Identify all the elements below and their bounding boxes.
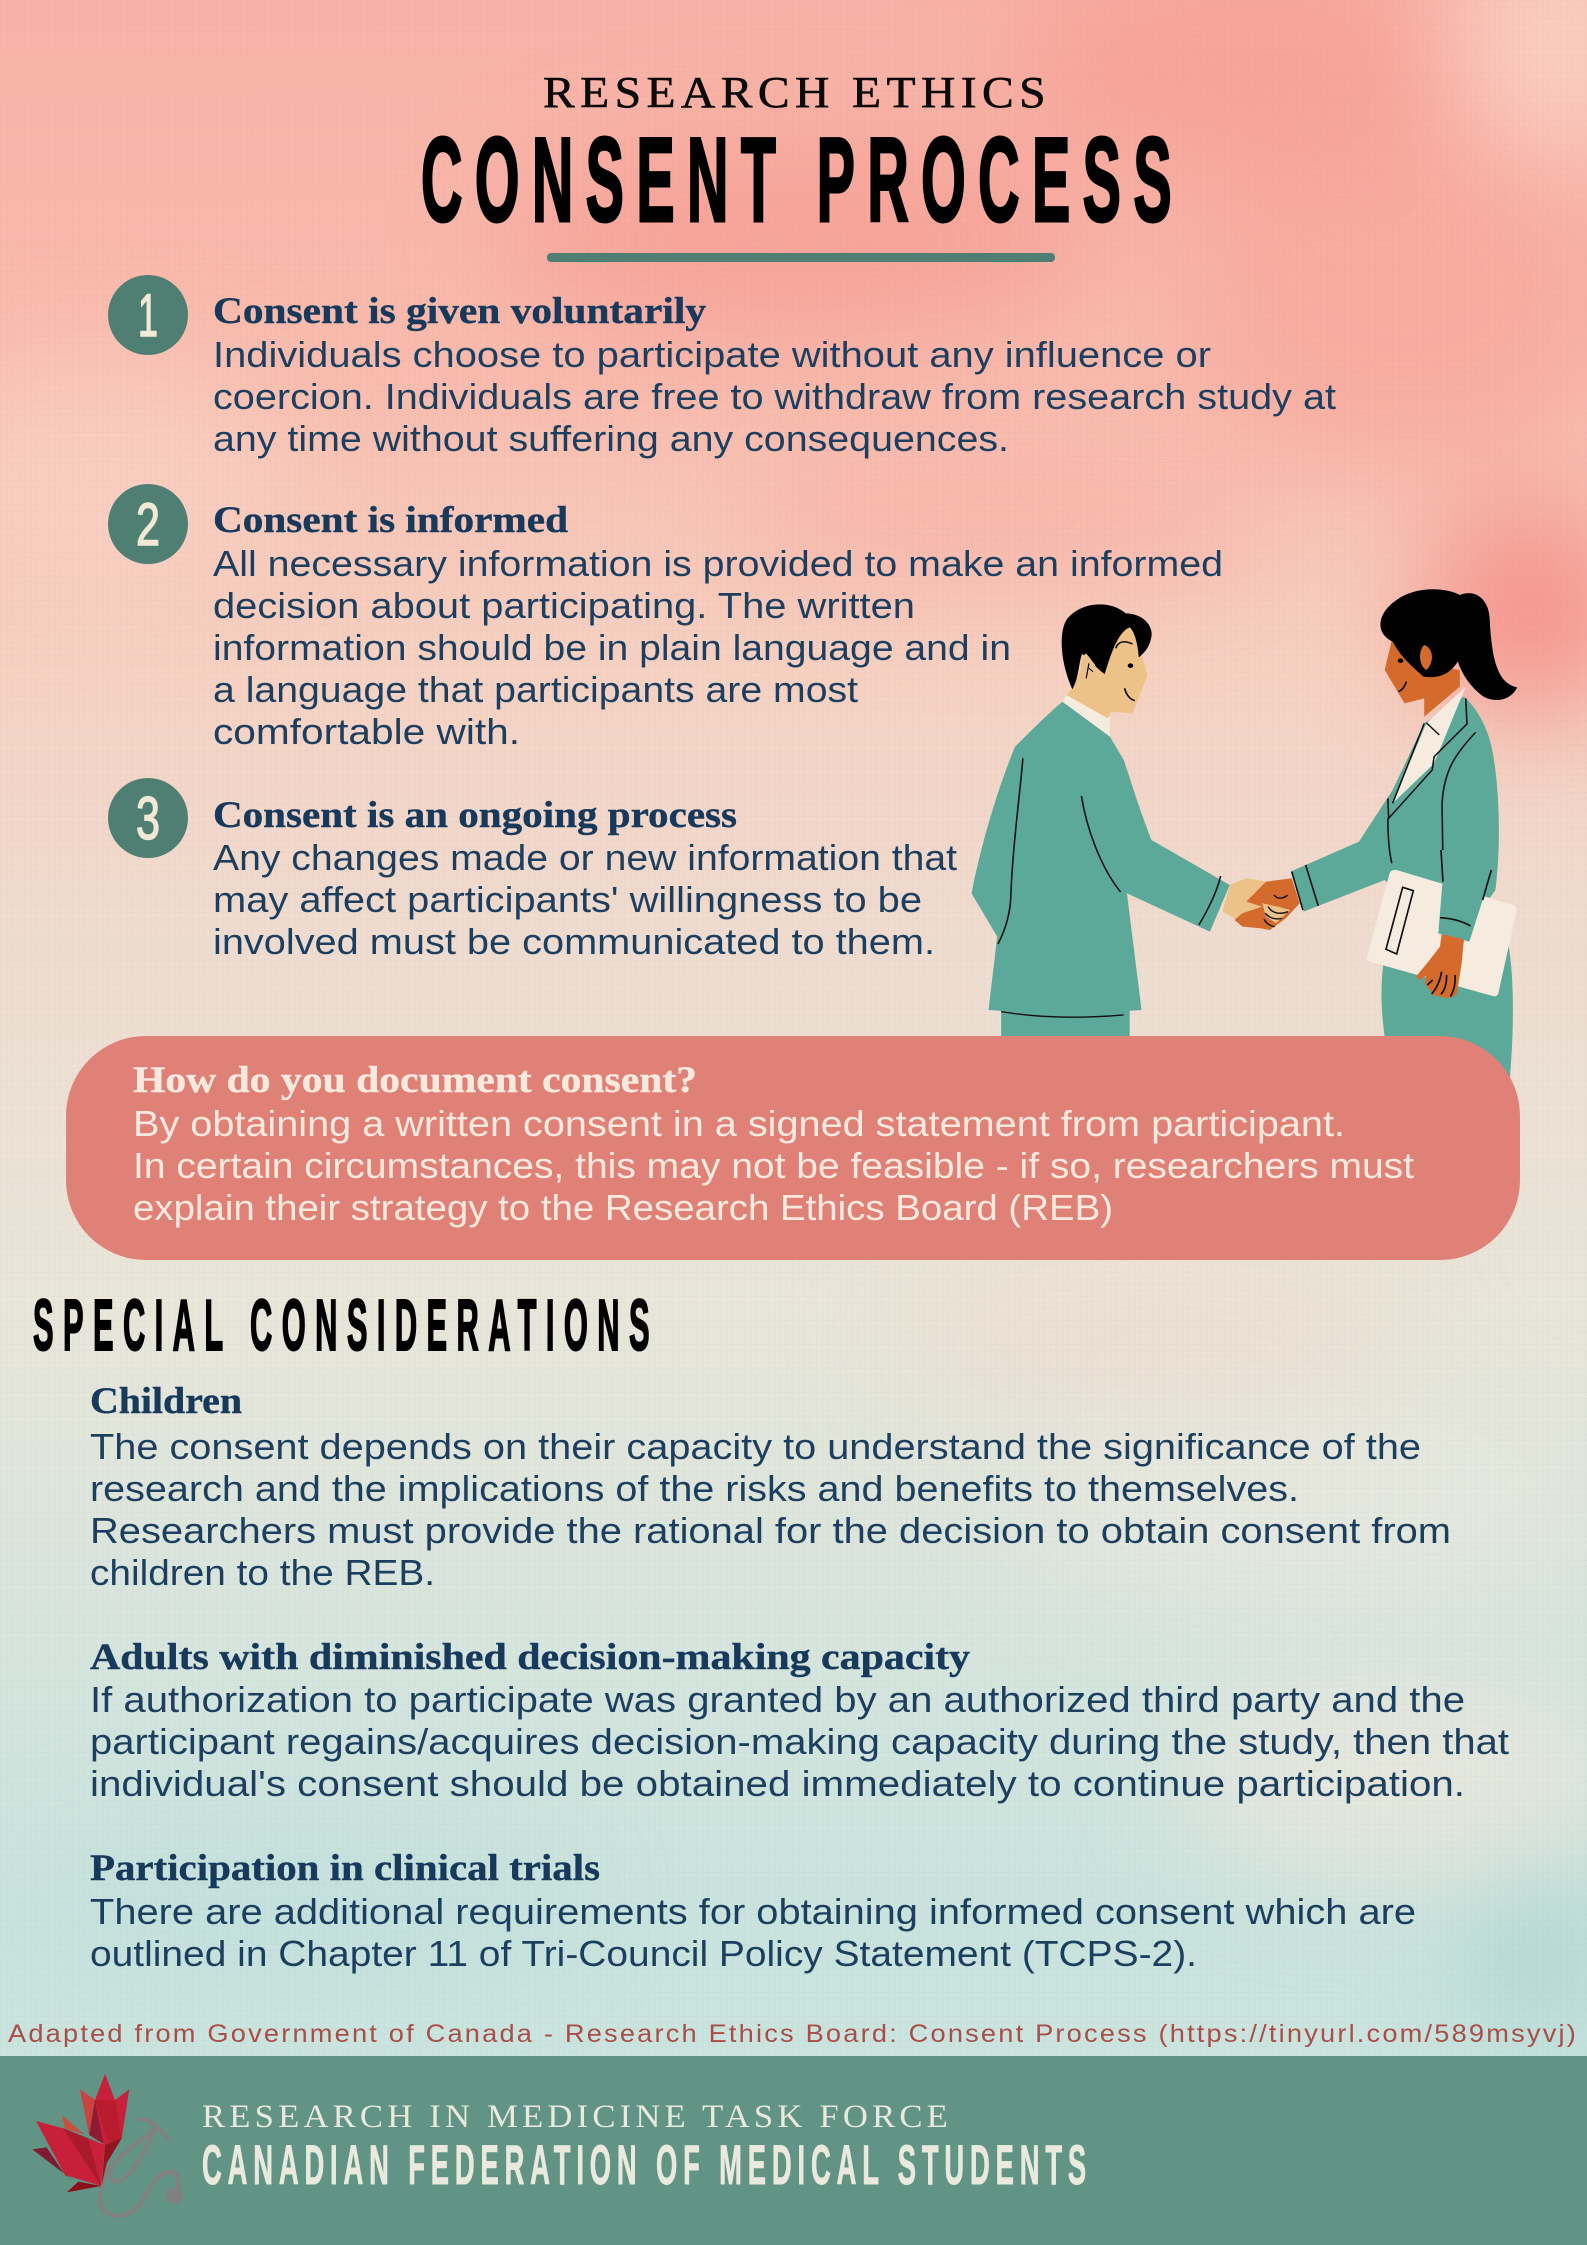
callout body: By obtaining a written consent in a signed statement from participant.: [133, 1103, 1345, 1144]
title underline: [547, 253, 1055, 262]
body 2: All necessary information is provided to make an informed: [213, 543, 1223, 584]
callout body: [133, 1103, 1414, 1228]
adults body: participant regains/acquires decision-making capacity during the study, then that: [90, 1721, 1509, 1762]
number badge 2: 2: [136, 491, 160, 558]
body 1: any time without suffering any consequences.: [213, 418, 1009, 459]
woman upper body: [1291, 589, 1517, 942]
handshake: [1223, 878, 1300, 930]
callout body: In certain circumstances, this may not be feasible - if so, researchers must: [133, 1145, 1414, 1186]
logo: maple leaf and stethoscope: [32, 2074, 183, 2216]
children heading: Children: [90, 1381, 242, 1422]
heading 1: Consent is given voluntarily: [213, 291, 707, 332]
section: children: [90, 1381, 1451, 1593]
text: SPECIAL CONSIDERATIONS: [33, 1286, 659, 1366]
trials body: There are additional requirements for obtaining informed consent which are: [90, 1891, 1416, 1932]
footer line 1: RESEARCH IN MEDICINE TASK FORCE: [202, 2099, 952, 2135]
callout heading: How do you document consent?: [133, 1060, 697, 1101]
title: [421, 68, 1184, 247]
body 1: coercion. Individuals are free to withdraw from research study at: [213, 376, 1336, 417]
body 3: Any changes made or new information that: [213, 837, 957, 878]
body 2: comfortable with.: [213, 711, 520, 752]
children body: research and the implications of the risks and benefits to themselves.: [90, 1468, 1299, 1509]
children body: The consent depends on their capacity to understand the significance of the: [90, 1426, 1421, 1467]
number badge 1: [108, 275, 188, 355]
body 3: [213, 837, 957, 962]
item 3: ongoing: [108, 778, 957, 962]
eyebrow: research ethics: RESEARCH ETHICS: [543, 68, 1051, 117]
number badge 2: [108, 484, 188, 564]
trials heading: Participation in clinical trials: [90, 1848, 600, 1889]
section: clinical trials: [90, 1848, 1416, 1974]
man: [972, 604, 1230, 1040]
body 1: [213, 334, 1336, 459]
children body: [90, 1426, 1451, 1593]
body 3: involved must be communicated to them.: [213, 921, 935, 962]
children body: children to the REB.: [90, 1552, 435, 1593]
callout: documenting consent: [66, 1036, 1520, 1260]
heading 3: Consent is an ongoing process: [213, 795, 737, 836]
trials body: outlined in Chapter 11 of Tri-Council Policy Statement (TCPS-2).: [90, 1933, 1197, 1974]
adults body: individual's consent should be obtained immediately to continue participation.: [90, 1763, 1465, 1804]
number badge 1: 1: [138, 282, 158, 349]
woman: skirt, document, forearm: [1367, 850, 1517, 1077]
section: adults with diminished capacity: [90, 1637, 1509, 1804]
trials body: [90, 1891, 1416, 1974]
item 1: voluntary: [108, 275, 1336, 459]
heading 2: Consent is informed: [213, 500, 568, 541]
body 2: [213, 543, 1223, 752]
body 3: may affect participants' willingness to be: [213, 879, 922, 920]
adults body: [90, 1679, 1509, 1804]
body 2: decision about participating. The written: [213, 585, 915, 626]
adults heading: Adults with diminished decision-making capacity: [90, 1637, 971, 1678]
number badge 3: [108, 778, 188, 858]
children body: Researchers must provide the rational for the decision to obtain consent from: [90, 1510, 1451, 1551]
adults body: If authorization to participate was granted by an authorized third party and the: [90, 1679, 1465, 1720]
footer band: [0, 2056, 1587, 2245]
callout body: explain their strategy to the Research Ethics Board (REB): [133, 1187, 1113, 1228]
number badge 3: 3: [136, 785, 160, 852]
source note: Adapted from Government of Canada - Research Ethics Board: Consent Process (https://tinyurl.com/589msyvj): [8, 2020, 1578, 2048]
body 1: Individuals choose to participate without any influence or: [213, 334, 1211, 375]
body 2: information should be in plain language and in: [213, 627, 1011, 668]
illustration: two people shaking hands: [972, 589, 1517, 1077]
item 2: informed: [108, 484, 1223, 752]
body 2: a language that participants are most: [213, 669, 858, 710]
